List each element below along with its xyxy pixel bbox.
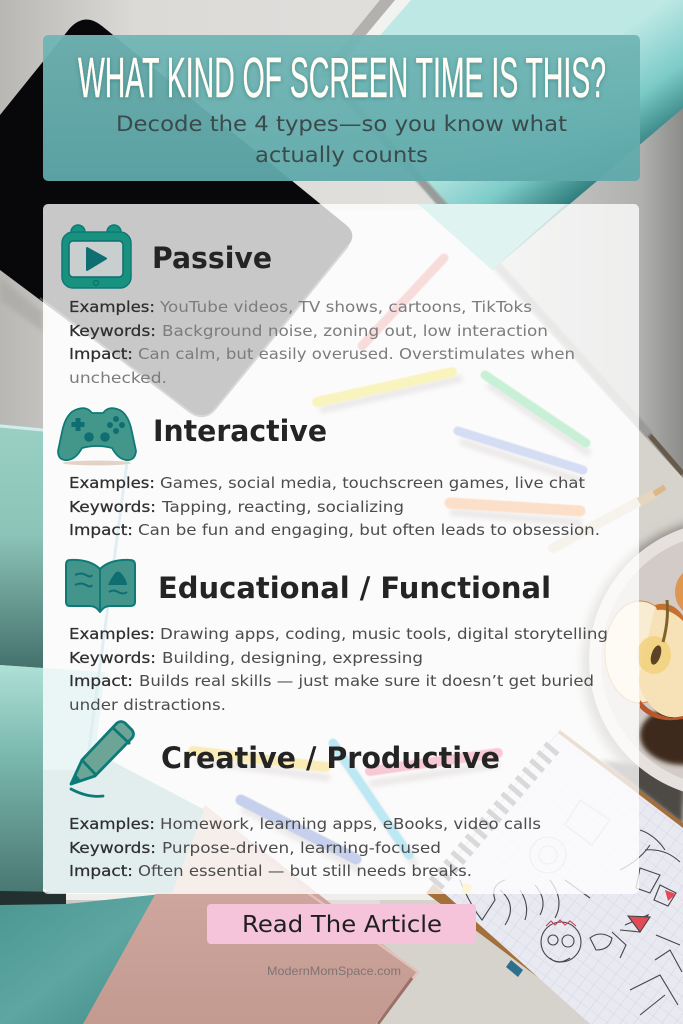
text: Educational details: Impact: (69, 672, 133, 690)
icon: TV with play button (62, 225, 131, 288)
heading: Interactive: Interactive (153, 414, 327, 448)
subtitle: Decode the 4 types—so you know what (116, 112, 567, 137)
text: Passive details: Background noise, zoning out, low interaction (162, 322, 548, 340)
text: Passive details: YouTube videos, TV shows, cartoons, TikToks (159, 298, 532, 316)
button: Read The Article (207, 904, 476, 944)
website credit: ModernMomSpace.com (267, 964, 401, 978)
heading: Educational / Functional: Educational / Functional (158, 571, 551, 605)
lower desk tone (380, 430, 683, 1024)
text: Passive details: Examples: (69, 298, 155, 316)
fruit bowl (582, 518, 683, 810)
main content panel (43, 204, 665, 894)
apple halves (675, 568, 683, 616)
text: Interactive details: Games, social media, touchscreen games, live chat (160, 474, 585, 492)
text: Passive details: unchecked. (69, 369, 167, 387)
tablet (0, 19, 352, 416)
icon: pencil (71, 722, 134, 796)
subtitle (116, 112, 567, 168)
text: Educational details: Examples: (69, 625, 155, 643)
sketchbook doodles (460, 800, 682, 1015)
text: Educational details: Keywords: (69, 649, 156, 667)
spiral sketchbook (426, 730, 683, 1024)
text: Passive details: Can calm, but easily overused. Overstimulates when (138, 345, 575, 363)
text: Creative details: Purpose-driven, learning-focused (162, 839, 441, 857)
text: Passive details: Keywords: (69, 322, 156, 340)
section: Creative / Productive (69, 722, 541, 880)
text: Educational details: Building, designing, expressing (162, 649, 423, 667)
text: Interactive details: Can be fun and engaging, but often leads to obsession. (138, 521, 600, 539)
section: Interactive (58, 408, 600, 539)
text: Educational details (69, 625, 608, 714)
button: Read The Article: Read The Article (242, 912, 442, 938)
text: Creative details: Examples: (69, 815, 155, 833)
text: Creative details: Keywords: (69, 839, 156, 857)
text: Creative details: Often essential — but still needs breaks. (138, 862, 472, 880)
text: Creative details (69, 815, 541, 880)
text: Interactive details: Tapping, reacting, socializing (161, 498, 404, 516)
text: Passive details: Impact: (69, 345, 133, 363)
panel tints and crayons seen through panel (43, 204, 665, 893)
text: Creative details: Impact: (69, 862, 133, 880)
text: Educational details: Drawing apps, coding, music tools, digital storytelling (160, 625, 608, 643)
teal notebook top right (335, 0, 683, 270)
teal notebook left (0, 424, 43, 668)
text: Interactive details: Impact: (69, 521, 133, 539)
section: Passive (62, 225, 575, 387)
icon: game controller (58, 408, 136, 466)
header panel (43, 35, 640, 181)
icon: open book (66, 560, 135, 612)
section: Educational / Functional (66, 560, 608, 714)
heading: Creative / Productive: Creative / Productive (161, 741, 500, 775)
heading: Passive: Passive (152, 241, 272, 275)
text: Interactive details: Keywords: (69, 498, 156, 516)
silver laptop (492, 105, 683, 478)
text: Creative details: Homework, learning apps, eBooks, video calls (160, 815, 541, 833)
text: Educational details: Builds real skills — just make sure it doesn’t get buried (139, 672, 594, 690)
text: Educational details: under distractions. (69, 696, 226, 714)
pink notebook (83, 805, 418, 1024)
subtitle: actually counts (255, 143, 428, 168)
text: Interactive details: Examples: (69, 474, 155, 492)
text: Interactive details (69, 474, 600, 539)
text: Passive details (69, 298, 575, 387)
